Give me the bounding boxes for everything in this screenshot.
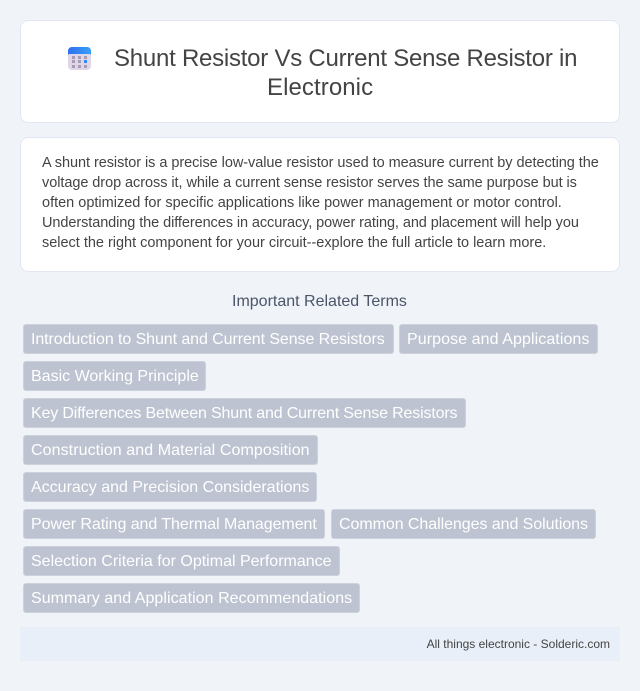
text block: summary: A shunt resistor is a precise low-value resistor used to measure current by detecting the (42, 155, 599, 171)
tag: Introduction to Shunt and Current Sense Resistors (31, 331, 385, 348)
heading: title line 1: Shunt Resistor Vs Current Sense Resistor in (114, 45, 577, 72)
tag: Basic Working Principle (31, 368, 199, 385)
tag: Key Differences Between Shunt and Current Sense Resistors (31, 405, 457, 422)
tag (23, 583, 360, 613)
tag (399, 324, 598, 354)
tag: Summary and Application Recommendations (31, 590, 352, 607)
tag (23, 435, 318, 465)
tag: Common Challenges and Solutions (339, 516, 588, 533)
tag: Power Rating and Thermal Management (31, 516, 317, 533)
text block: summary: Understanding the differences in accuracy, power rating, and placement will help you (42, 215, 579, 231)
text block: summary: often optimized for specific applications like power management or motor control. (42, 195, 562, 211)
tag: Purpose and Applications (407, 331, 590, 348)
heading: related terms: Important Related Terms (232, 293, 407, 310)
tag (23, 472, 317, 502)
panel: title card (20, 20, 620, 123)
text block: summary (42, 155, 599, 251)
tag (23, 546, 340, 576)
tag (23, 361, 206, 391)
tag (23, 398, 466, 428)
footer (20, 627, 620, 661)
tag (23, 509, 325, 539)
panel: summary card (20, 137, 620, 272)
tag list: related terms (23, 324, 598, 613)
tag: Selection Criteria for Optimal Performance (31, 553, 332, 570)
text block: summary: voltage drop across it, while a current sense resistor serves the same purpose but is (42, 175, 577, 191)
heading: title line 2: Electronic (267, 74, 373, 101)
tag: Accuracy and Precision Considerations (31, 479, 309, 496)
footer text: All things electronic - Solderic.com (427, 637, 610, 651)
icon: calendar grid (68, 47, 91, 70)
tag (331, 509, 596, 539)
tag: Construction and Material Composition (31, 442, 310, 459)
text block: summary: select the right component for your circuit--explore the full article to learn more. (42, 235, 546, 251)
tag (23, 324, 394, 354)
